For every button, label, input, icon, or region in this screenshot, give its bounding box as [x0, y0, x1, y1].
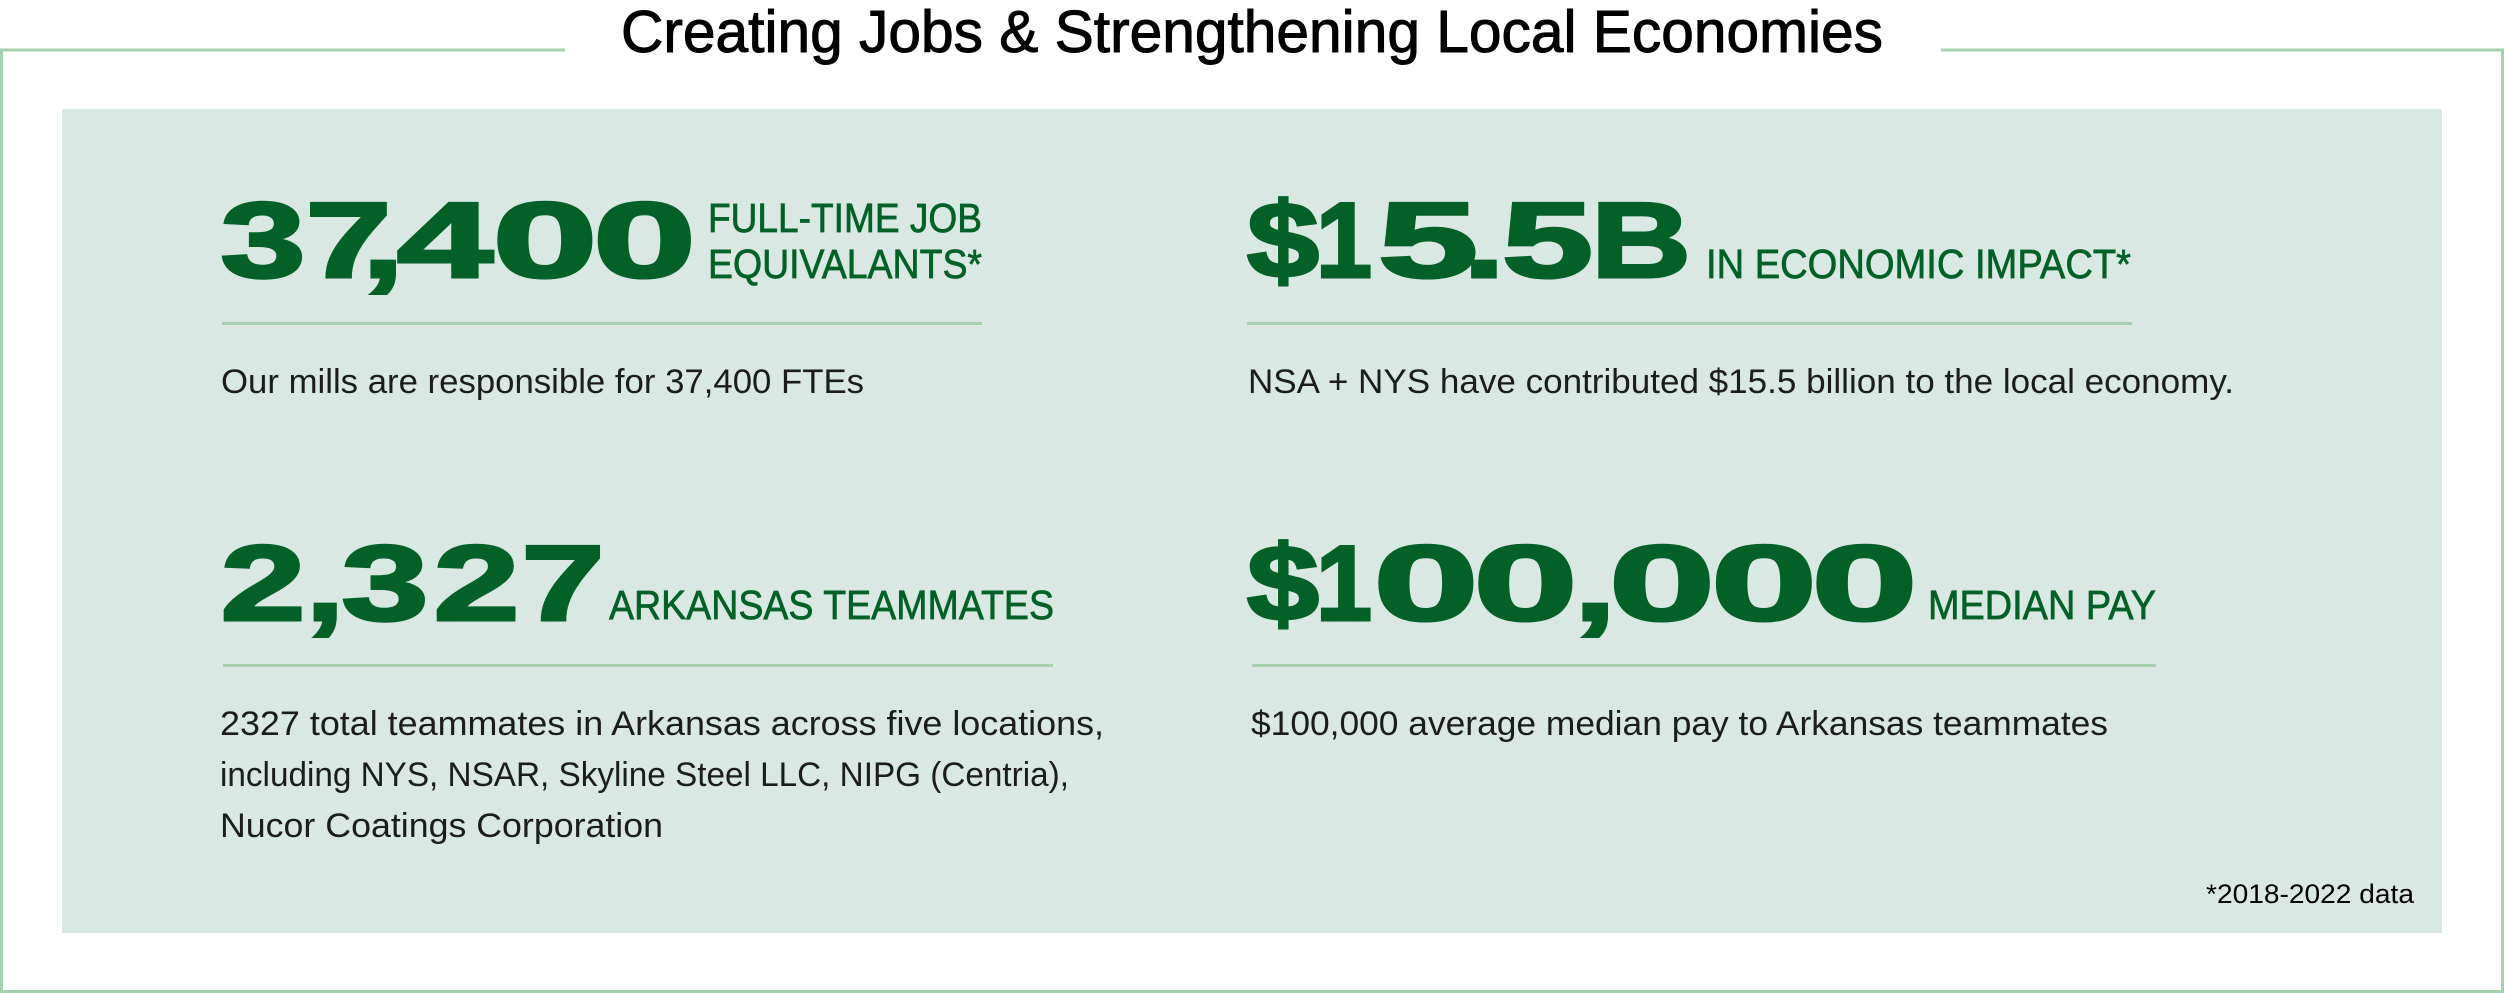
big number: 2 [220, 523, 306, 643]
big number: 5 [1378, 180, 1478, 300]
big number: 0 [492, 180, 598, 300]
big number: 5 [1502, 180, 1593, 300]
description: including NYS, NSAR, Skyline Steel LLC, NIPG (Centria), [220, 756, 1069, 794]
big number: 0 [1374, 523, 1478, 643]
divider [223, 664, 1053, 667]
label [708, 195, 982, 287]
description: Nucor Coatings Corporation [220, 807, 663, 845]
label: ARKANSAS TEAMMATES [609, 582, 1054, 628]
stat: median pay [1247, 523, 2156, 743]
panel: statistics [62, 109, 2442, 933]
big number: 3 [220, 180, 306, 300]
stat: economic impact [1247, 180, 2234, 401]
divider [1247, 322, 2132, 325]
stat: Arkansas teammates [220, 523, 1104, 845]
big number: 1 [1316, 523, 1372, 643]
big number: 0 [1609, 523, 1715, 643]
label: MEDIAN PAY [1928, 582, 2156, 628]
description: Our mills are responsible for 37,400 FTEs [221, 363, 864, 401]
label: EQUIVALANTS* [708, 241, 982, 287]
big number: 4 [397, 180, 493, 300]
big number: 3 [342, 523, 428, 643]
big number: . [1463, 180, 1505, 300]
big number: , [1574, 523, 1616, 643]
label: IN ECONOMIC IMPACT* [1706, 241, 2131, 287]
divider [1252, 664, 2156, 667]
big number: 0 [593, 180, 696, 300]
footnote: *2018-2022 data [2206, 879, 2415, 909]
big number: 2 [434, 523, 520, 643]
big number: 7 [522, 523, 604, 643]
description: 2327 total teammates in Arkansas across five locations, [220, 705, 1104, 743]
big number: 0 [1711, 523, 1817, 643]
description: NSA + NYS have contributed $15.5 billion to the local economy. [1248, 363, 2234, 401]
big number: $ [1247, 523, 1319, 643]
description [220, 705, 1104, 845]
big number: 0 [1474, 523, 1578, 643]
big number: 7 [306, 180, 392, 300]
stat: full-time job equivalents [220, 180, 982, 401]
big number: , [306, 523, 344, 643]
description: $100,000 average median pay to Arkansas teammates [1251, 705, 2108, 743]
label: FULL-TIME JOB [708, 195, 982, 241]
big number: B [1591, 180, 1691, 300]
big number: 0 [1812, 523, 1918, 643]
panel background [62, 109, 2442, 933]
big number: , [362, 180, 404, 300]
title: Creating Jobs & Strengthening Local Economies [621, 0, 1883, 65]
big number: 1 [1316, 180, 1372, 300]
divider [222, 322, 982, 325]
big number: $ [1247, 180, 1319, 300]
